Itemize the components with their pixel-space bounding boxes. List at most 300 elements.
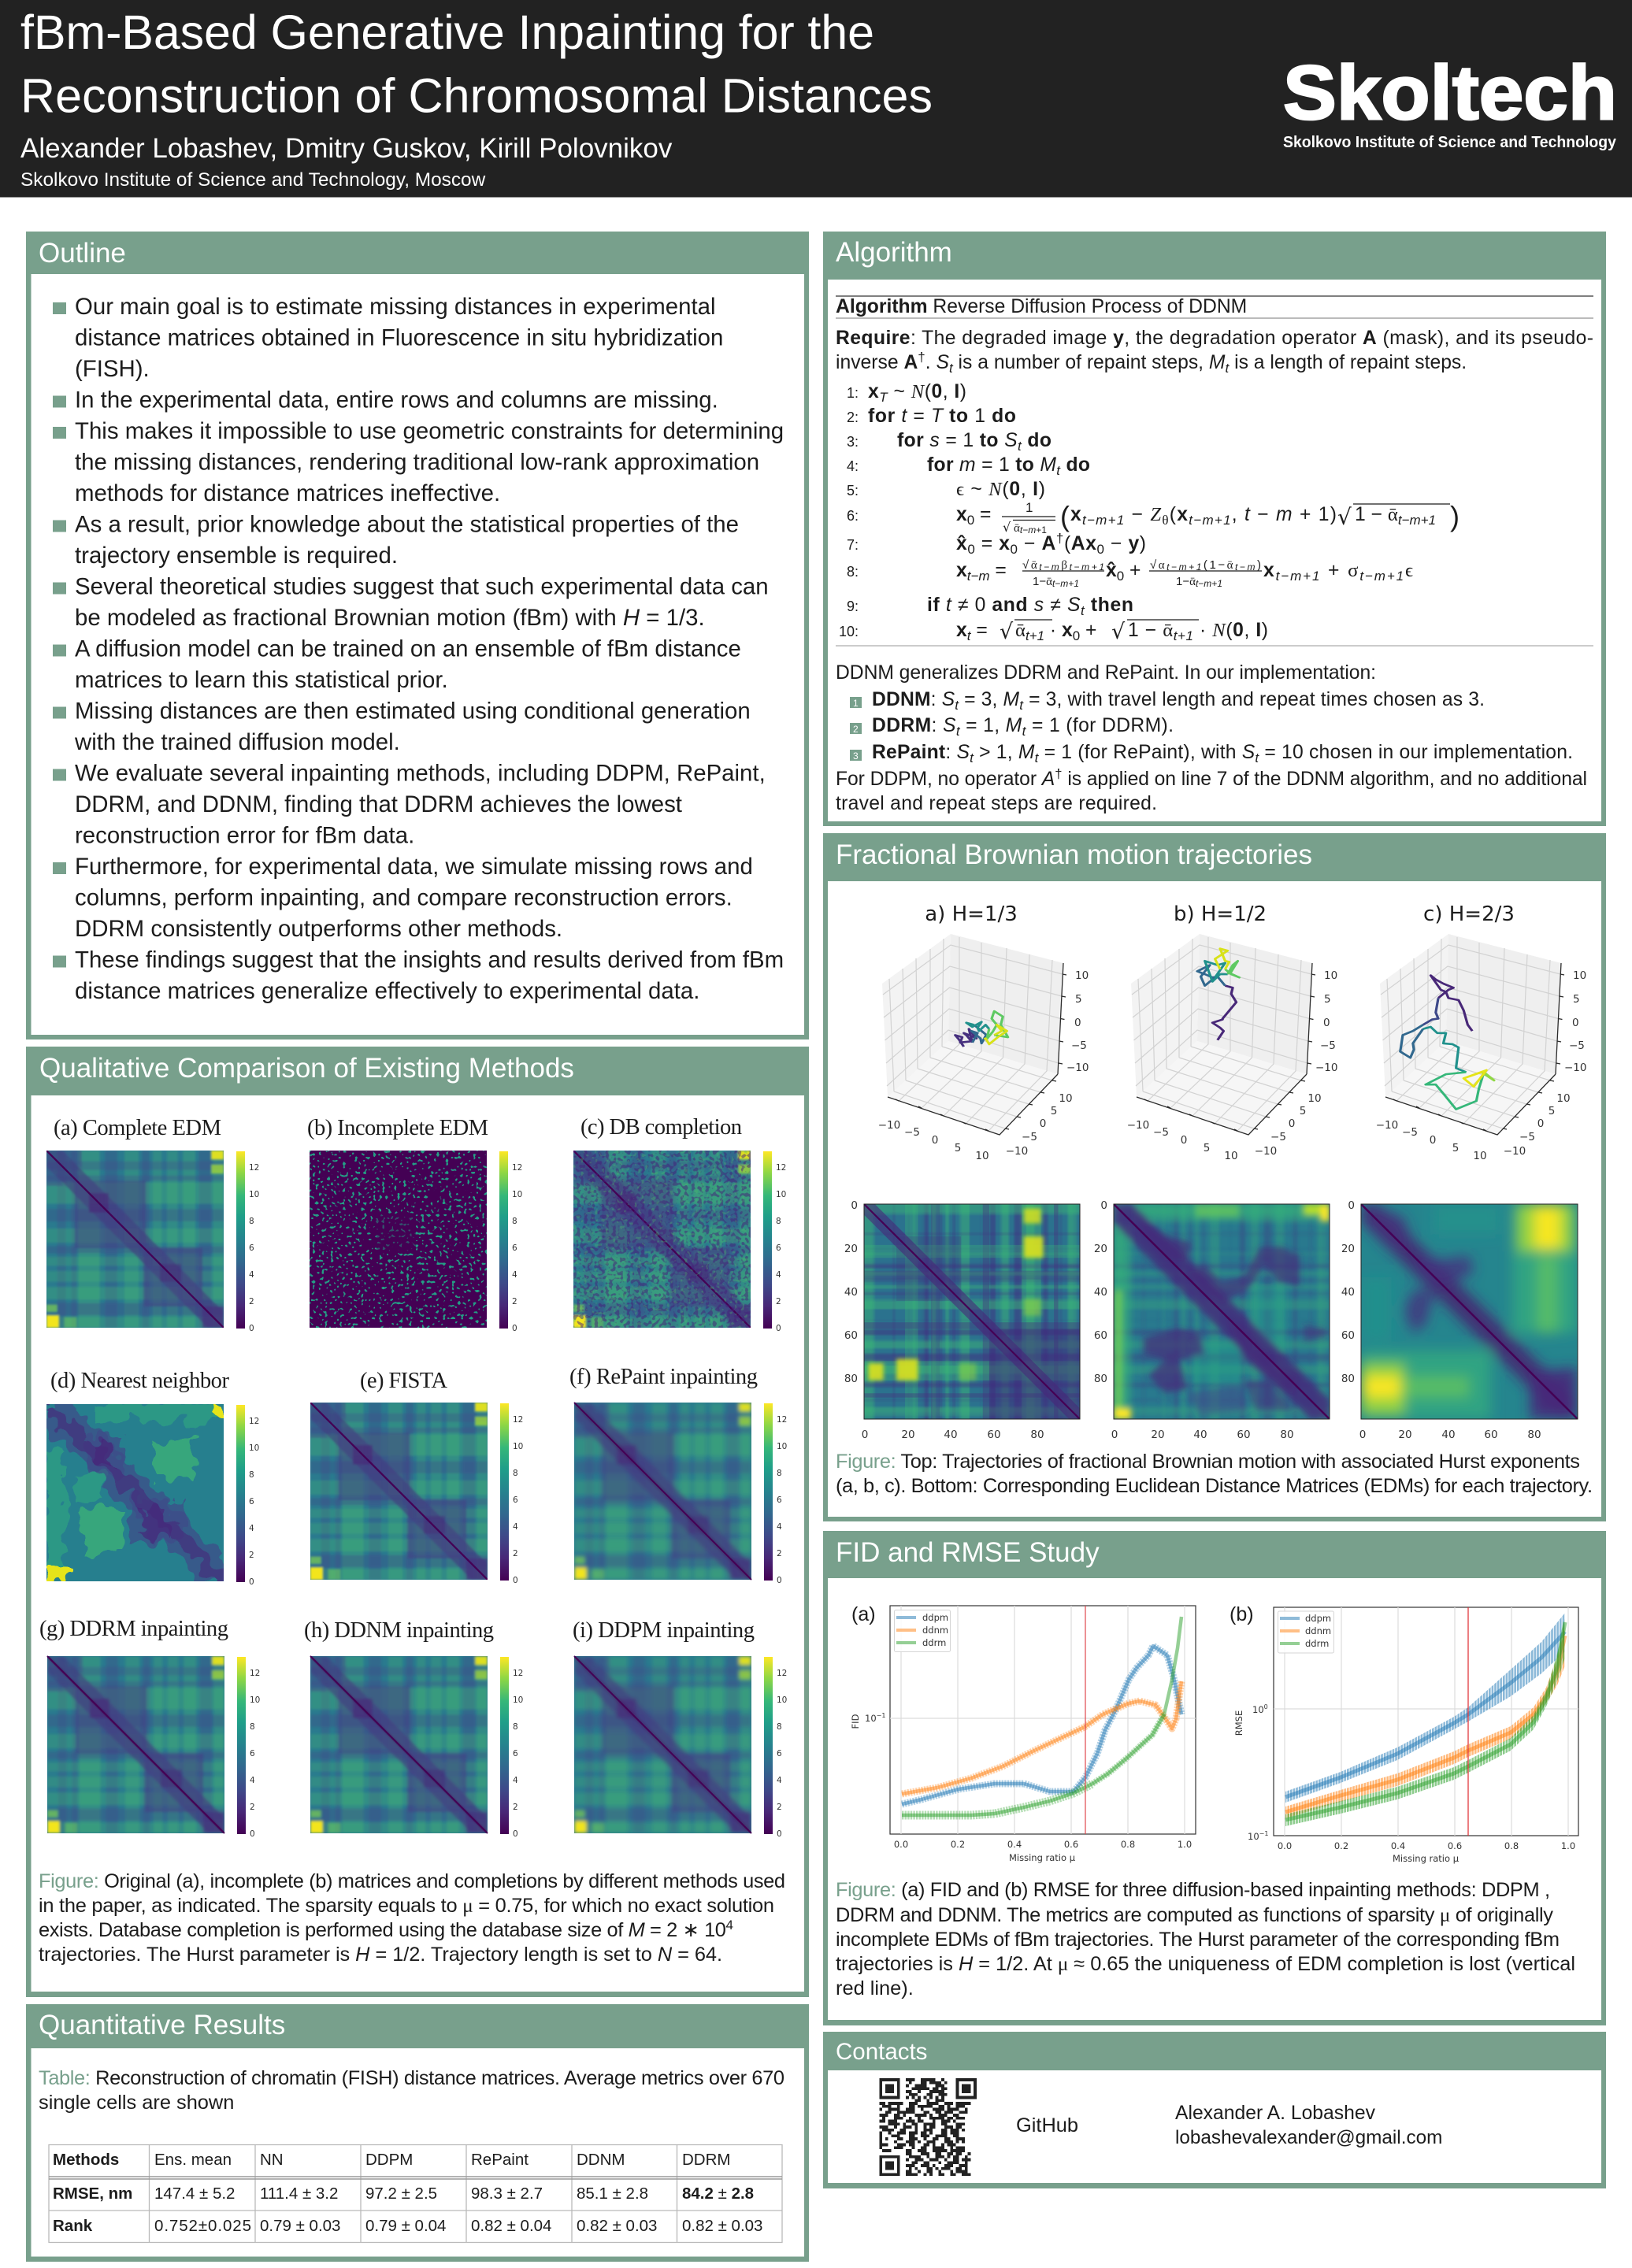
figure caption: Figure: Original (a), incomplete (b) matrices and completions by different methods used [39,1870,785,1892]
3D plot c: 5 [1549,1105,1555,1117]
3D plot a: −10 [878,1119,900,1132]
results table: 84.2 ± 2.8 [682,2185,754,2203]
line 8: + [1124,560,1141,581]
DDNM notes: travel and repeat steps are required. [836,793,1157,814]
line 10: · [1194,620,1212,641]
3D plot b: 10 [1224,1150,1238,1162]
figure caption: 4 [726,1918,733,1933]
results table: RePaint [471,2151,529,2169]
line 8: x̂ [1106,560,1117,581]
pseudocode: 6: [847,508,859,524]
EDM heatmap b: 40 [1094,1286,1107,1299]
legend: ddrm [1305,1638,1329,1649]
outline text block: These findings suggest that the insights and results derived from fBm [75,947,784,973]
line 7: x [999,533,1010,554]
line 8: t−m [1039,561,1059,573]
pseudocode: 1: [847,385,859,401]
DDNM notes: DDNM generalizes DDRM and RePaint. In our implementation: [836,662,1376,684]
heatmap: DDNM inpainting: 12 [513,1669,523,1678]
3D plot a: 5 [1051,1105,1057,1117]
heatmap: RePaint inpainting: 8 [777,1469,782,1478]
pseudocode: 8: [847,564,859,580]
require statement: M [1209,352,1226,373]
pseudocode: x [868,381,879,402]
panel: Qualitative Comparison [11,1047,809,1997]
line 10: √ [1111,620,1126,644]
heading: FID and RMSE: FID and RMSE Study [836,1537,1100,1568]
line chart: FID: (a) [851,1603,876,1625]
line 6: x [1177,504,1188,525]
heatmap: DDRM inpainting: 6 [250,1749,255,1758]
DDNM notes: = 1 (for DDRM). [1026,715,1174,736]
outline text block: DDRM consistently outperforms other methods. [75,916,562,942]
line chart: FID: FID [850,1714,861,1729]
heatmap: DDNM inpainting: 2 [513,1803,518,1812]
heatmap: incomplete EDM: 12 [512,1163,522,1173]
3D plot b: −10 [1127,1119,1149,1132]
heatmap: DDPM inpainting: 6 [777,1749,782,1758]
3D plot a: 10 [1059,1092,1073,1105]
outline text block [74,294,784,1004]
line chart: FID: 0.8 [1121,1839,1135,1850]
line 6: t−m+1 [1189,513,1231,528]
line chart: RMSE: (b) [1230,1603,1254,1625]
heatmap: DDRM inpainting: 12 [250,1669,260,1678]
line 6: ( [1170,504,1177,525]
line chart: FID: 10 [865,1713,877,1724]
EDM heatmap b: 80 [1280,1429,1294,1441]
DDNM notes: 2 [853,724,859,735]
results table [49,2145,782,2243]
heatmap: complete EDM: 2 [249,1297,254,1306]
3D plot c: 5 [1452,1142,1459,1154]
3D plot b: 10 [1307,1092,1322,1105]
3D plot b: 5 [1204,1142,1210,1154]
table caption: Table: Reconstruction of chromatin (FISH) distance matrices. Average metrics over 670 [39,2067,784,2089]
EDM heatmap a: 60 [987,1429,1001,1441]
heatmap: FISTA: 10 [513,1442,523,1451]
heatmap titles: (c) DB completion [580,1115,742,1140]
outline text block: Several theoretical studies suggest that such experimental data can [75,573,769,600]
line 7: † [1056,531,1063,546]
legend: ddrm [922,1637,946,1648]
heatmap: FISTA: 0 [513,1576,518,1585]
3D plot a: a) H=1/3 [925,902,1018,926]
3D plot a: 10 [1075,969,1089,982]
heatmap: DB completion [573,1151,786,1333]
heading: Contacts: Contacts [836,2039,927,2065]
heatmap: DDPM inpainting: 0 [777,1829,782,1839]
3D plot a: −5 [1071,1040,1087,1052]
heatmap: DB completion: 4 [776,1270,781,1280]
DDNM notes: is applied on line 7 of the DDNM algorithm, and no additional [1063,769,1587,790]
3D plot a: 0 [932,1134,938,1147]
heatmap: RePaint inpainting [574,1403,787,1585]
EDM heatmap c: 60 [1341,1329,1355,1342]
3D plot c: −5 [1569,1040,1585,1052]
3D plot c: 10 [1473,1150,1487,1162]
require statement: † [918,350,925,365]
line chart: FID: 0.4 [1007,1839,1022,1850]
3D plot a: 5 [955,1142,961,1154]
heatmap: nearest neighbor: 0 [249,1577,254,1587]
figure caption: incomplete EDMs of fBm trajectories. The Hurst parameter of the corresponding fBm [836,1929,1560,1951]
heatmap: DDRM inpainting: 8 [250,1722,255,1732]
require statement: S [936,352,949,373]
3D plot b: −5 [1270,1131,1286,1143]
results table: 0.82 ± 0.03 [577,2217,657,2235]
DDNM notes: † [1055,766,1063,781]
heatmap: RePaint inpainting: 0 [777,1576,782,1585]
line 8: β [1061,559,1067,572]
heatmap: RePaint inpainting: 12 [777,1415,787,1425]
results table: 0.79 ± 0.03 [260,2217,340,2235]
EDM heatmap a: 80 [844,1373,858,1385]
EDM heatmap c: 0 [1359,1429,1366,1441]
require statement: Require: The degraded image y, the degradation operator A (mask), and its pseudo- [836,328,1593,349]
pseudocode: for s = 1 to S [897,430,1018,451]
outline text block: DDRM, and DDNM, finding that DDRM achieves the lowest [75,791,682,817]
3D plot a: 5 [1075,993,1082,1006]
contact details: Alexander A. Lobashev [1175,2103,1376,2124]
outline text block: methods for distance matrices ineffective. [75,480,500,506]
heading: Fractional Brownian motion: Fractional Brownian motion trajectories [836,839,1312,870]
DDNM notes: = 3, [959,689,1003,710]
heatmap: DDRM inpainting: 4 [250,1776,255,1785]
heatmap: complete EDM: 8 [249,1217,254,1226]
line 6: t−m+1 [1398,513,1436,528]
outline text block: Our main goal is to estimate missing distances in experimental [75,294,715,320]
outline text block: be modeled as fractional Brownian motion (fBm) with H = 1/3. [75,605,705,631]
pseudocode: do [1066,454,1090,476]
title [20,6,933,123]
legend: ddnm [1305,1625,1331,1636]
results table: DDPM [365,2151,413,2169]
3D plot b: 0 [1181,1134,1187,1147]
line 10: · [1044,620,1062,641]
heatmap: nearest neighbor [11,1369,259,1617]
algorithm caption: Algorithm Reverse Diffusion Process of DDNM [836,296,1247,317]
line 6: ( [1060,500,1070,532]
pseudocode: 5: [847,483,859,498]
heatmap: incomplete EDM: 0 [512,1324,517,1333]
line 8: t−m+1 [1052,578,1079,589]
heatmap: DDNM inpainting: 8 [513,1722,518,1732]
outline text block: As a result, prior knowledge about the statistical properties of the [75,512,739,537]
results table: 0.82 ± 0.04 [471,2217,551,2235]
pseudocode: then [1091,595,1133,616]
pseudocode: N(0, I) [911,381,966,402]
legend [1278,1611,1334,1653]
heatmap: DDPM inpainting: 10 [777,1695,787,1705]
line chart: RMSE: 0.4 [1391,1840,1405,1851]
heatmap: DDPM inpainting: 2 [777,1803,782,1812]
heatmap titles: (f) RePaint inpainting [569,1365,758,1389]
line 7: − [1105,533,1128,554]
line 8: 1−ᾱ [1176,575,1196,588]
results table: 0.79 ± 0.04 [365,2217,446,2235]
3D plot c: 0 [1537,1117,1544,1130]
line chart: RMSE: RMSE [1233,1710,1244,1736]
outline text block: (FISH). [75,356,150,382]
line 8: t−m+1 [1070,561,1104,573]
heatmap: incomplete EDM: 4 [512,1270,517,1280]
line 8: x [956,560,967,581]
EDM heatmap a: 0 [851,1199,858,1212]
line chart: RMSE: 0.0 [1278,1840,1292,1851]
pseudocode: for m = 1 to M [927,454,1056,476]
line 8: 0 [1117,569,1124,584]
3D plot a [878,902,1089,1162]
figure caption: (a, b, c). Bottom: Corresponding Euclidean Distance Matrices (EDMs) for each trajectory. [836,1475,1593,1497]
results table: DDNM [577,2151,625,2169]
contact details [1175,2103,1442,2148]
panel: Fractional Brownian motion trajectories [823,833,1606,1521]
heatmap: nearest neighbor: 4 [249,1524,254,1533]
line 8: t−m+1 [1196,578,1222,589]
pseudocode: t [1056,463,1061,478]
heatmap: nearest neighbor: 2 [249,1551,254,1560]
3D plot c: −10 [1504,1145,1526,1158]
EDM heatmap a: 40 [944,1429,958,1441]
line chart: FID: Missing ratio μ [1009,1852,1076,1863]
line chart: RMSE: 0.8 [1504,1840,1519,1851]
3D plot c: 5 [1573,993,1580,1006]
3D plot b: −5 [1153,1126,1169,1139]
EDM heatmap b [1094,1199,1330,1441]
DDNM notes: M [1003,689,1020,710]
panel: Outline [26,232,809,1040]
pseudocode: 4: [847,458,859,474]
line 8: √α [1150,558,1165,572]
DDNM notes: For DDPM, no operator A [836,769,1055,790]
3D plot c: 0 [1572,1017,1579,1029]
title: fBm-Based Generative Inpainting for the [20,6,874,59]
outline text block: reconstruction error for fBm data. [75,822,414,849]
heatmap: incomplete EDM: 10 [512,1190,522,1199]
heatmap: DB completion: 8 [776,1217,781,1226]
EDM heatmap a: 20 [901,1429,915,1441]
heatmap titles: (d) Nearest neighbor [50,1369,229,1393]
DDNM notes: = 10 chosen in our implementation. [1259,742,1573,763]
heatmap: complete EDM: 0 [249,1324,254,1333]
EDM heatmap c [1341,1199,1578,1441]
outline text block: with the trained diffusion model. [74,729,400,755]
heatmap titles: (h) DDNM inpainting [304,1618,494,1643]
outline text block: trajectory ensemble is required. [75,543,398,569]
line 7: − [1018,533,1041,554]
pseudocode: ϵ ~ N(0, I) [956,479,1045,500]
line 7: x̂ [956,533,967,554]
line 7: Ax [1071,533,1096,554]
pseudocode: 3: [847,434,859,450]
figure caption: DDRM and DDNM. The metrics are computed as functions of sparsity μ of originally [836,1904,1553,1926]
heatmap: incomplete EDM: 6 [512,1243,517,1253]
EDM heatmap b: 0 [1111,1429,1118,1441]
results table: 147.4 ± 5.2 [154,2185,235,2203]
line 10: + [1080,620,1096,641]
line 7: = [975,533,999,554]
line 8: + [1321,560,1346,581]
heatmap titles: (i) DDPM inpainting [573,1618,755,1643]
EDM heatmap c: 20 [1398,1429,1412,1441]
figure caption [39,1870,785,1966]
line 8: 1−ᾱ [1033,575,1052,588]
results table: NN [260,2151,284,2169]
3D plot c: 10 [1556,1092,1571,1105]
pseudocode: if t ≠ 0 and s ≠ S [927,595,1080,616]
outline text block: the missing distances, rendering traditional low-rank approximation [75,449,759,476]
line 7: ( [1064,533,1071,554]
3D plot a: 0 [1040,1117,1046,1130]
3D plot a: −5 [1022,1131,1037,1143]
3D plot b [1127,902,1337,1162]
pseudocode [836,381,1593,646]
outline text block: distance matrices obtained in Fluorescence in situ hybridization [75,324,723,351]
pseudocode: T [879,390,888,405]
DDNM notes: = 1 (for RePaint), with [1039,742,1242,763]
table caption [39,2067,784,2114]
outline text block: columns, perform inpainting, and compare reconstruction errors. [75,885,733,910]
heatmap: DDPM inpainting: 12 [777,1669,787,1678]
line chart: FID: 0.2 [951,1839,965,1850]
line 6: 0 [967,513,974,528]
heatmap: nearest neighbor: 6 [249,1497,254,1506]
line chart: FID: 0.6 [1064,1839,1078,1850]
3D plot b: 10 [1324,969,1337,982]
EDM heatmap b: 60 [1094,1329,1107,1342]
figure caption: trajectories. The Hurst parameter is H = 1/2. Trajectory length is set to N = 64. [39,1944,722,1966]
EDM heatmap c: 80 [1527,1429,1541,1441]
results table: Ens. mean [154,2151,232,2169]
3D plot b: 5 [1300,1105,1306,1117]
DDNM notes: M [1006,715,1022,736]
outline text block: distance matrices generalize effectively to experimental data. [75,978,699,1004]
3D plot b: 0 [1323,1017,1330,1029]
line 6: ᾱ [1014,522,1020,535]
bullet markers [53,302,66,967]
DDNM notes: = 3, with travel length and repeat times chosen as 3. [1023,689,1485,710]
line 10: = [970,620,988,641]
3D plot c: −5 [1402,1126,1418,1139]
EDM heatmap a: 80 [1030,1429,1044,1441]
DDNM notes: M [1018,742,1035,763]
header banner [0,0,1632,197]
DDNM notes: DDNM: S [872,689,955,710]
line 6: θ [1162,513,1169,528]
icon: QR code [879,2078,977,2176]
heatmap: nearest neighbor: 8 [249,1470,254,1480]
heatmap: DDPM inpainting: 8 [777,1722,782,1732]
line 7: 0 [1011,542,1018,557]
affiliation: Skolkovo Institute of Science and Technology, Moscow [20,169,486,191]
line 6: t−m+1 [1082,513,1124,528]
heatmap: DB completion: 12 [776,1163,786,1173]
line 6: , [1232,504,1244,525]
figure caption [836,1451,1593,1497]
EDM heatmap b: 80 [1094,1373,1107,1385]
heatmap: FISTA: 8 [513,1469,518,1478]
logo: Skoltech: Skoltech [1283,50,1617,135]
line 10 [956,620,1268,644]
heatmap: DB completion: 0 [776,1324,781,1333]
EDM heatmap a: 0 [862,1429,868,1441]
line chart: RMSE: 10 [1252,1704,1264,1715]
figure caption: exists. Database completion is performed using the database size of M = 2 ∗ 10 [39,1919,726,1941]
3D plot c: −10 [1376,1119,1398,1132]
DDNM notes: t [1019,698,1024,713]
DDNM notes: 1 [853,698,859,709]
line 8: t−m [1235,561,1255,573]
EDM heatmap a: 40 [844,1286,858,1299]
3D plot c: −10 [1564,1062,1586,1074]
heatmap: incomplete EDM: 8 [512,1217,517,1226]
line 10: t [967,628,972,643]
results table: DDRM [682,2151,731,2169]
require statement: is a number of repaint steps, [953,352,1209,373]
DDNM notes: DDRM: S [872,715,955,736]
results table: 97.2 ± 2.5 [365,2185,437,2203]
line 6: x [956,504,967,525]
figure caption: red line). [836,1977,914,1999]
line 10: N(0, I) [1212,620,1268,641]
require statement: . [925,352,936,373]
line 6: ) [1450,500,1460,532]
line 6: Z [1150,504,1161,525]
heatmap titles: (a) Complete EDM [54,1116,221,1140]
outline text block: In the experimental data, entire rows and columns are missing. [75,387,718,413]
line 8: ϵ [1405,560,1413,581]
DDNM notes: RePaint: S [872,742,970,763]
line 10: t+1 [1026,628,1044,643]
heatmap: complete EDM: 12 [249,1163,259,1173]
line 6: − [1126,504,1149,525]
heading: Algorithm: Algorithm [836,237,952,268]
GitHub label: GitHub [1016,2114,1078,2136]
3D plot a: 10 [975,1150,989,1162]
heatmap: complete EDM: 10 [249,1190,259,1199]
DDNM notes: S [1242,742,1256,763]
legend [895,1610,950,1652]
results table: Methods [53,2151,119,2169]
pseudocode: 2: [847,410,859,425]
heatmap titles: (e) FISTA [360,1369,447,1393]
DDNM notes: t [955,698,959,713]
heatmap: complete EDM: 6 [249,1243,254,1253]
heatmap: nearest neighbor: 10 [249,1443,259,1453]
DDNM notes: t [1035,750,1040,765]
line chart: RMSE: 0.6 [1448,1840,1462,1851]
line 6: √ [1003,520,1011,535]
line chart: RMSE: 1.0 [1561,1840,1575,1851]
pseudocode: do [1027,430,1052,451]
EDM heatmap c: 40 [1441,1429,1456,1441]
line chart: FID: 1.0 [1178,1839,1192,1850]
line 10: x [1062,620,1073,641]
EDM heatmap b: 20 [1094,1243,1107,1255]
heatmap: incomplete EDM [310,1151,522,1333]
line 8: t−m+1 [1276,569,1319,584]
DDNM notes: t [1022,724,1027,739]
heatmap: DDNM inpainting: 0 [513,1829,518,1839]
panel: FID and RMSE Study [823,1531,1606,2025]
pseudocode: 9: [847,598,859,614]
EDM heatmap c: 20 [1341,1243,1355,1255]
3D plot c: −5 [1519,1131,1535,1143]
3D plot a: −10 [1006,1145,1028,1158]
require statement: is a length of repaint steps. [1229,352,1467,373]
line 10: 1 − ᾱ [1128,620,1173,641]
